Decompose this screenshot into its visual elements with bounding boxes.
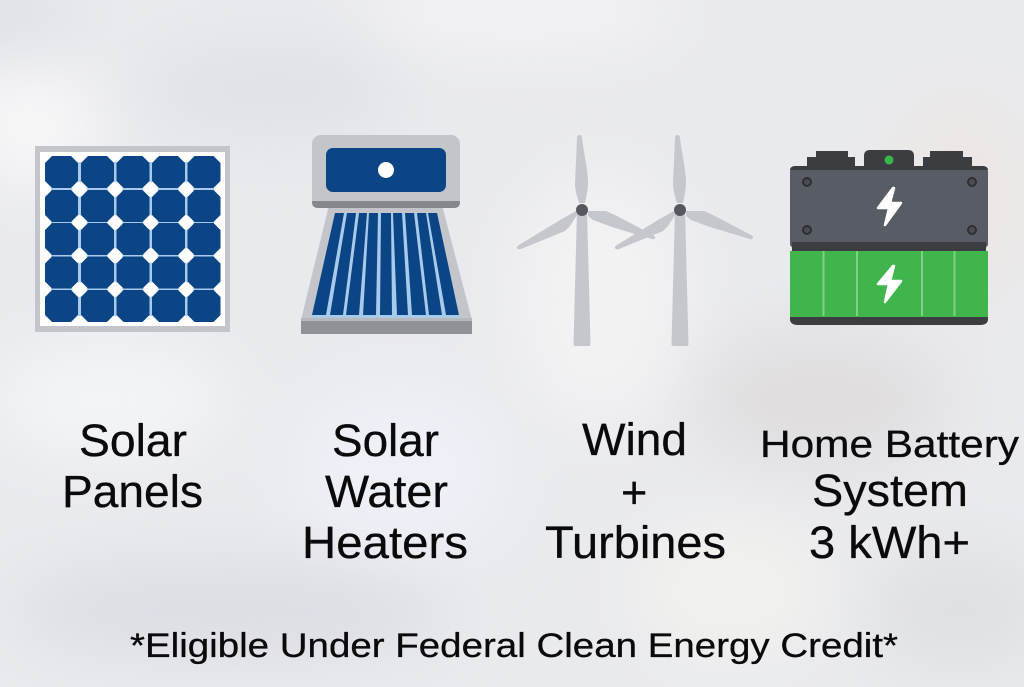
- label: wind turbines: [545, 414, 726, 568]
- label: home battery system: [760, 424, 1019, 568]
- label: home battery system: 3 kWh+: [809, 517, 970, 568]
- turbine left: [517, 135, 655, 346]
- icon: home battery: [790, 150, 988, 325]
- footnote: *Eligible Under Federal Clean Energy Credit*: [130, 627, 898, 665]
- label: solar water heaters: Solar: [332, 415, 439, 466]
- turbine right: [615, 135, 753, 346]
- label: home battery system: System: [812, 465, 968, 516]
- label: wind turbines: Wind: [582, 414, 687, 465]
- label: wind turbines: Turbines: [545, 517, 726, 568]
- label: solar panels: Solar: [79, 415, 187, 466]
- label: wind turbines: +: [621, 467, 647, 518]
- label: solar water heaters: [302, 415, 468, 568]
- icon: solar panel: [35, 146, 230, 332]
- label: solar water heaters: Water: [325, 466, 448, 517]
- icon: solar water heater: [301, 135, 472, 334]
- icon: wind turbines: [517, 135, 753, 346]
- label: solar panels: [62, 415, 203, 517]
- label: home battery system: Home Battery: [760, 424, 1019, 466]
- label: solar panels: Panels: [62, 466, 203, 517]
- label: solar water heaters: Heaters: [302, 517, 468, 568]
